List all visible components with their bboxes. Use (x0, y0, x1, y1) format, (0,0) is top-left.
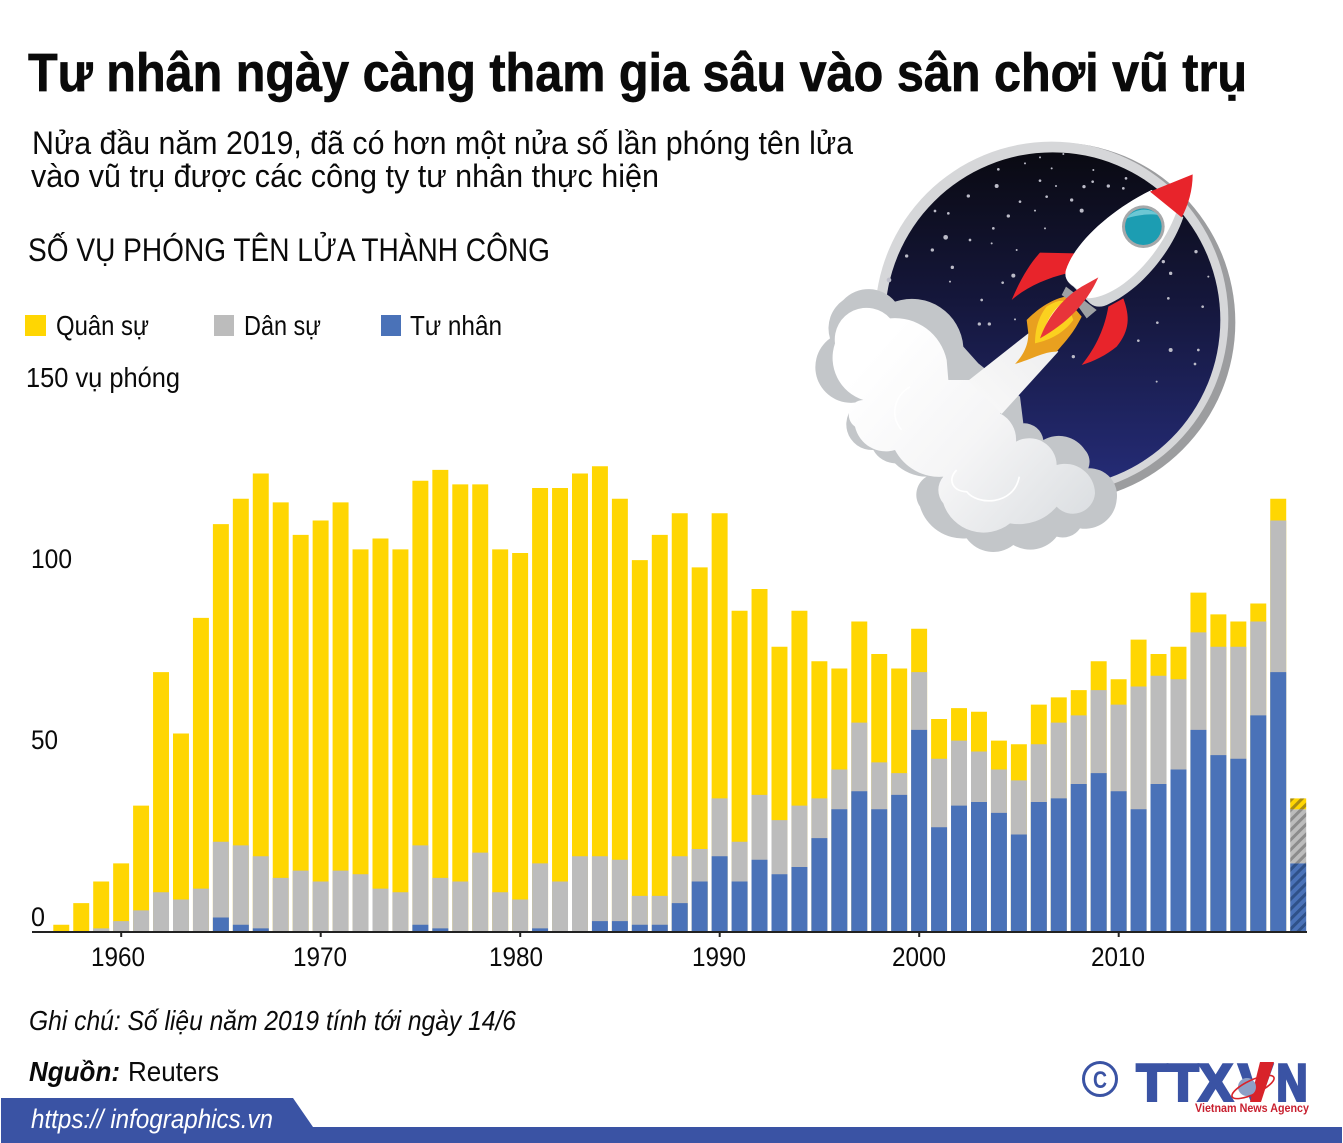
legend item: civil: Dân sự (244, 310, 321, 341)
y axis labels: 100 (31, 544, 72, 574)
agency name: Vietnam News Agency (1195, 1103, 1310, 1115)
y axis labels: 50 (31, 725, 58, 755)
body highlight (1065, 190, 1177, 298)
x axis labels: 1960 (91, 942, 145, 972)
y axis labels: 0 (31, 902, 45, 932)
bars: civil (93, 520, 1286, 932)
stars (887, 153, 1209, 383)
nose cone (1150, 174, 1193, 217)
x axis labels: 2010 (1091, 942, 1145, 972)
bar: 2019 partial year, hatched (1290, 798, 1306, 932)
red V stroke (1250, 1062, 1274, 1102)
copyright mark (1084, 1062, 1116, 1096)
porthole ring (875, 142, 1235, 502)
x axis labels: 2000 (892, 942, 946, 972)
nozzle (1062, 287, 1097, 318)
wordmark: V (1238, 1054, 1273, 1112)
footer band (1, 1098, 1342, 1143)
cloud puff outlines (895, 387, 1019, 501)
chart heading: SỐ VỤ PHÓNG TÊN LỬA THÀNH CÔNG (28, 232, 550, 268)
subtitle: vào vũ trụ được các công ty tư nhân thực hiện (31, 158, 659, 194)
source: Nguồn: (29, 1056, 120, 1087)
y axis unit label: 150 vụ phóng (26, 362, 180, 393)
rocket (1012, 174, 1193, 365)
y axis labels (31, 544, 72, 932)
wordmark (1136, 1054, 1308, 1112)
exhaust trail (968, 333, 1058, 414)
rocket body (1065, 190, 1183, 307)
legend item: military (25, 310, 149, 341)
x axis labels: 1970 (293, 942, 347, 972)
x axis labels: 1990 (692, 942, 746, 972)
logo: TTXVN Vietnam News Agency (1084, 1054, 1310, 1115)
globe emblem (1229, 1071, 1277, 1103)
left fin (1012, 253, 1076, 300)
right fin (1082, 298, 1128, 365)
x axis labels (91, 942, 1145, 972)
note: Ghi chú: Số liệu năm 2019 tính tới ngày 14/6 (29, 1005, 516, 1036)
center fin (1040, 277, 1098, 338)
source: Reuters (128, 1056, 219, 1087)
legend item: private (381, 310, 502, 341)
subtitle (31, 125, 853, 194)
legend item: private: Tư nhân (410, 310, 502, 341)
cloud shadow layer (815, 289, 1117, 552)
legend item: military: Quân sự (56, 310, 149, 341)
illustration: rocket launching from clouds (815, 142, 1235, 552)
bars: private (213, 672, 1286, 932)
legend (25, 310, 502, 341)
x axis labels: 1980 (489, 942, 543, 972)
wordmark: N (1276, 1054, 1308, 1112)
footer url: https:// infographics.vn (31, 1104, 273, 1134)
window (1122, 205, 1165, 248)
bars: military (total height) (53, 466, 1286, 932)
x axis line and ticks (32, 932, 1307, 937)
legend item: civil (214, 310, 321, 341)
cloud front layer (833, 308, 1095, 533)
stacked bar chart: launches per year (31, 466, 1307, 972)
flame (1015, 297, 1082, 364)
source (29, 1056, 219, 1087)
wordmark: TTX (1136, 1054, 1233, 1112)
subtitle: Nửa đầu năm 2019, đã có hơn một nửa số lần phóng tên lửa (32, 125, 853, 161)
copyright mark: C (1093, 1067, 1107, 1094)
